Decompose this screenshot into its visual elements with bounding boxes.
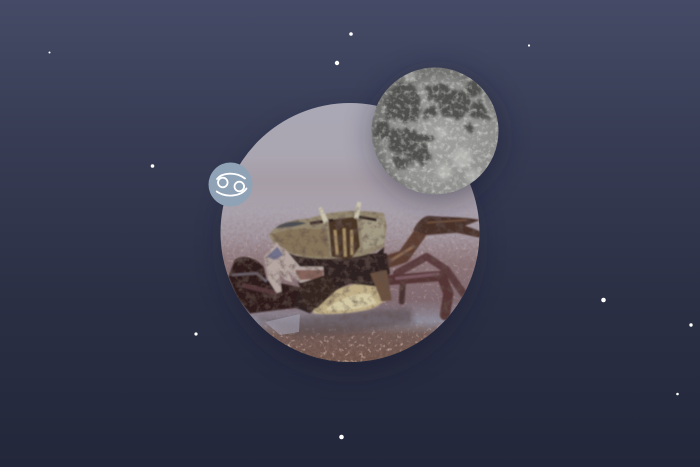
- photo shadow: [222, 117, 478, 373]
- crab shadow in water: [253, 308, 413, 335]
- moon shadow: [371, 70, 503, 202]
- front claw: [264, 243, 324, 293]
- upper right claw: [413, 216, 481, 238]
- left back claw: [228, 257, 310, 313]
- moon: [371, 67, 499, 195]
- back right legs: [382, 233, 463, 315]
- bright rays: [404, 70, 479, 183]
- crab: [228, 202, 481, 335]
- water reflection glint: [265, 314, 300, 335]
- body underside: [313, 280, 387, 314]
- carapace: [269, 211, 387, 259]
- eye stalks: [318, 207, 329, 224]
- moon maria: [374, 77, 487, 167]
- pebbles: [220, 217, 479, 362]
- cancer zodiac icon: [208, 162, 252, 206]
- photo: crab on beach: [220, 103, 481, 365]
- dark mouth area: [287, 253, 390, 313]
